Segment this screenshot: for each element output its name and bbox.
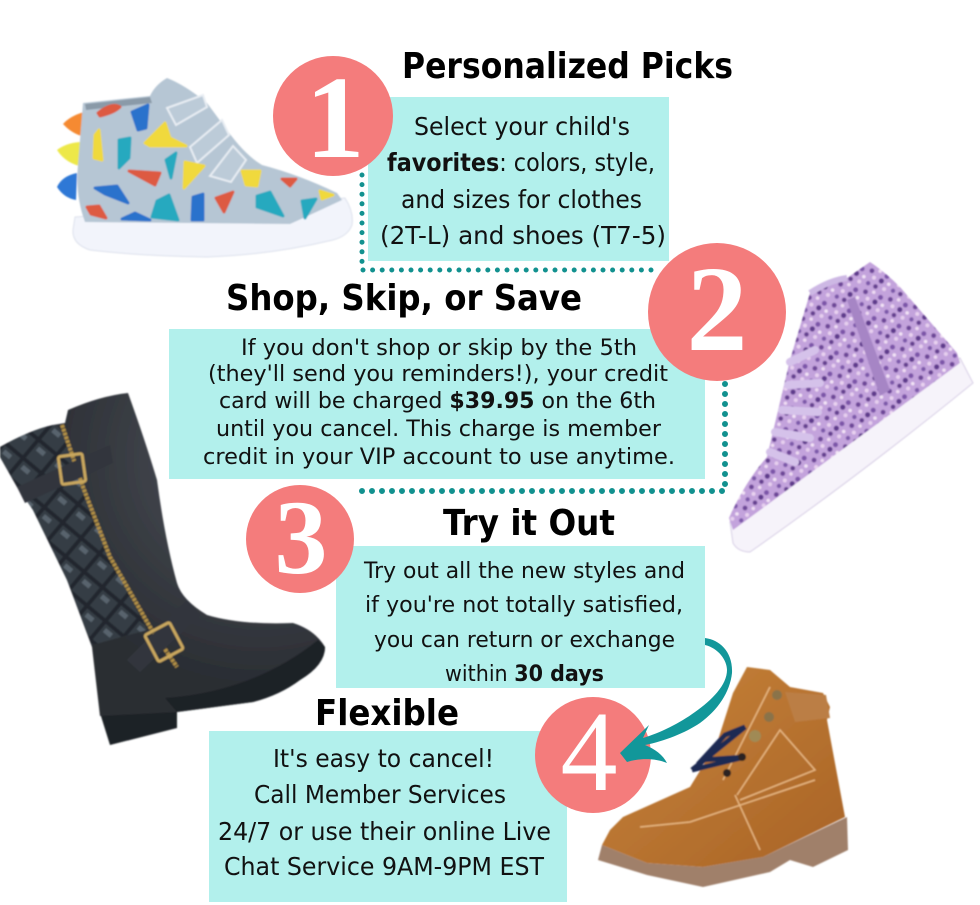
shoe: dinosaur sneaker <box>57 78 352 257</box>
panel: step 1 box <box>368 97 669 261</box>
text block: step 1: favorites: colors, style, <box>387 148 655 177</box>
text block: step 3: within 30 days <box>445 661 604 687</box>
text block: step 1: Select your child's <box>414 112 630 141</box>
text block: step 3 <box>363 558 685 687</box>
shoe: purple glitter sneaker <box>729 262 973 552</box>
text block: step 3: if you're not totally satisfied, <box>365 592 683 618</box>
shoe: tan lace-up boot <box>598 667 848 887</box>
arrow: step 3 to 4 <box>620 638 732 763</box>
text block: step 1 <box>380 112 666 250</box>
number badge 2: 2 <box>686 242 748 377</box>
dotted connector: step 1 to 2 <box>362 175 660 270</box>
text block: step 2: credit in your VIP account to use anytime. <box>203 444 675 470</box>
number badge 3 <box>246 479 354 596</box>
text block: step 3: you can return or exchange <box>374 627 675 653</box>
number badge 2 <box>648 242 786 381</box>
heading: Flexible: Flexible <box>315 693 459 734</box>
panel: step 3 box <box>336 546 705 688</box>
text block: step 2: card will be charged $39.95 on the 6th <box>219 388 656 414</box>
heading: Try it Out: Try it Out <box>443 503 615 544</box>
shoe: black quilted boot <box>0 393 325 745</box>
dotted connector: step 2 to 3 <box>352 384 725 491</box>
heading: Personalized Picks: Personalized Picks <box>402 46 733 87</box>
number badge 1: 1 <box>306 52 364 183</box>
text block: step 4: Chat Service 9AM-9PM EST <box>224 852 545 881</box>
text block: step 4: Call Member Services <box>254 780 506 809</box>
panel: step 4 box <box>209 731 567 902</box>
text block: step 2: until you cancel. This charge is member <box>216 416 662 442</box>
number badge 4: 4 <box>560 688 618 815</box>
text block: step 4: It's easy to cancel! <box>273 744 494 773</box>
text block: step 2: (they'll send you reminders!), your credit <box>208 361 668 387</box>
number badge 1 <box>273 52 393 183</box>
text block: step 1: and sizes for clothes <box>401 185 642 214</box>
text block: step 2 <box>203 335 675 470</box>
number badge 3: 3 <box>274 479 328 596</box>
heading: Shop, Skip, or Save: Shop, Skip, or Save <box>226 278 582 319</box>
text block: step 4: 24/7 or use their online Live <box>218 817 551 846</box>
text block: step 4 <box>218 744 551 881</box>
number badge 4 <box>535 688 651 815</box>
panel: step 2 box <box>169 329 705 479</box>
text block: step 3: Try out all the new styles and <box>363 558 685 584</box>
text block: step 1: (2T-L) and shoes (T7-5) <box>380 221 666 250</box>
text block: step 2: If you don't shop or skip by the 5th <box>241 335 637 361</box>
